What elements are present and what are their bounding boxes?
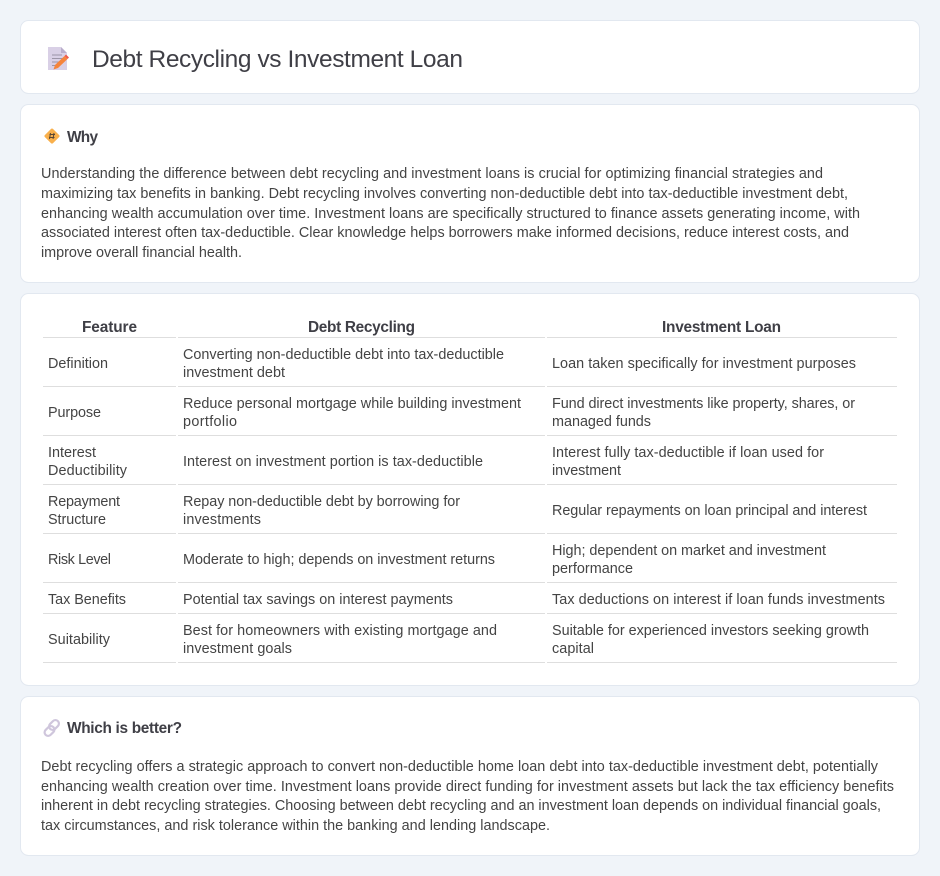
row: risk level: Risk Level	[48, 552, 111, 568]
row: purpose: Reduce personal mortgage while building investment	[183, 396, 521, 412]
table header row: Debt Recycling	[308, 319, 415, 336]
table header row: Investment Loan	[662, 319, 781, 336]
row: risk level	[43, 543, 897, 583]
text block: which is better paragraph: tax circumstances, and risk tolerance within the banking and lending landscape.	[41, 818, 550, 834]
table header row: Feature	[82, 319, 137, 336]
heading: which is better: Which is better?	[67, 720, 182, 737]
row: tax benefits: Potential tax savings on interest payments	[183, 592, 453, 608]
row: tax benefits	[43, 592, 897, 614]
text block: why paragraph	[41, 166, 860, 261]
row: definition: investment debt	[183, 365, 285, 381]
row: interest deductibility: Interest fully tax-deductible if loan used for	[552, 445, 824, 461]
row: interest deductibility: Interest	[48, 445, 96, 461]
text block: which is better paragraph: inherent in debt recycling strategies. Choosing between debt recycling and an investment loan depends on individual financial goals,	[41, 798, 881, 814]
row: suitability: Best for homeowners with existing mortgage and	[183, 623, 497, 639]
row: purpose: Purpose	[48, 405, 101, 421]
row: repayment structure	[43, 494, 897, 534]
panel: which is better	[20, 696, 920, 856]
row: suitability: Suitability	[48, 632, 111, 648]
text block: why paragraph: maximizing tax benefits in banking. Debt recycling involves converting non-deductible debt into tax-deductible investment debt,	[41, 186, 848, 202]
row: tax benefits: Tax deductions on interest if loan funds investments	[552, 592, 885, 608]
row: definition: Definition	[48, 356, 108, 372]
row: interest deductibility: Deductibility	[48, 463, 128, 479]
panel: comparison table	[20, 294, 920, 686]
row: repayment structure: Repayment	[48, 494, 120, 510]
heading: why: Why	[67, 129, 98, 146]
row: interest deductibility: investment	[552, 463, 621, 479]
icon: chain link	[43, 719, 60, 737]
row: repayment structure: investments	[183, 512, 261, 528]
row: suitability: capital	[552, 641, 594, 657]
text block: which is better paragraph: enhancing wealth creation over time. Investment loans provide direct funding for investment assets but lack the tax efficiency benefits	[41, 779, 894, 795]
row: risk level: High; dependent on market and investment	[552, 543, 826, 559]
row: interest deductibility	[43, 445, 897, 485]
table header row	[43, 319, 897, 338]
row: definition	[43, 347, 897, 387]
row: risk level: Moderate to high; depends on investment returns	[183, 552, 495, 568]
row: repayment structure: Regular repayments on loan principal and interest	[552, 503, 867, 519]
panel: why	[20, 104, 920, 282]
row: purpose: managed funds	[552, 414, 651, 430]
icon: document with pencil	[48, 47, 69, 70]
row: suitability: investment goals	[183, 641, 292, 657]
text block: which is better paragraph: Debt recycling offers a strategic approach to convert non-deductible home loan debt into tax-deductible investment debt, potentially	[41, 759, 879, 775]
panel: title header	[20, 20, 920, 94]
row: purpose	[43, 396, 897, 436]
icon: orange diamond	[44, 128, 60, 144]
text block: why paragraph: associated interest often tax-deductible. Clear knowledge helps borrowers make informed decisions, reduce interest costs, and	[41, 225, 849, 241]
row: definition: Converting non-deductible debt into tax-deductible	[183, 347, 504, 363]
text block: which is better paragraph	[41, 759, 894, 834]
row: suitability	[43, 623, 897, 663]
row: suitability: Suitable for experienced investors seeking growth	[552, 623, 869, 639]
row: repayment structure: Structure	[48, 512, 106, 528]
row: purpose: portfolio	[183, 414, 237, 430]
row: interest deductibility: Interest on investment portion is tax-deductible	[183, 454, 483, 470]
row: purpose: Fund direct investments like property, shares, or	[552, 396, 855, 412]
row: repayment structure: Repay non-deductible debt by borrowing for	[183, 494, 460, 510]
row: risk level: performance	[552, 561, 633, 577]
row: tax benefits: Tax Benefits	[48, 592, 126, 608]
title: Debt Recycling vs Investment Loan	[92, 46, 463, 73]
row: definition: Loan taken specifically for investment purposes	[552, 356, 856, 372]
text block: why paragraph: Understanding the difference between debt recycling and investment loans is crucial for optimizing financial strategies and	[41, 166, 823, 182]
text block: why paragraph: enhancing wealth accumulation over time. Investment loans are specifically structured to finance assets generating income, with	[41, 206, 860, 222]
text block: why paragraph: improve overall financial health.	[41, 245, 242, 261]
